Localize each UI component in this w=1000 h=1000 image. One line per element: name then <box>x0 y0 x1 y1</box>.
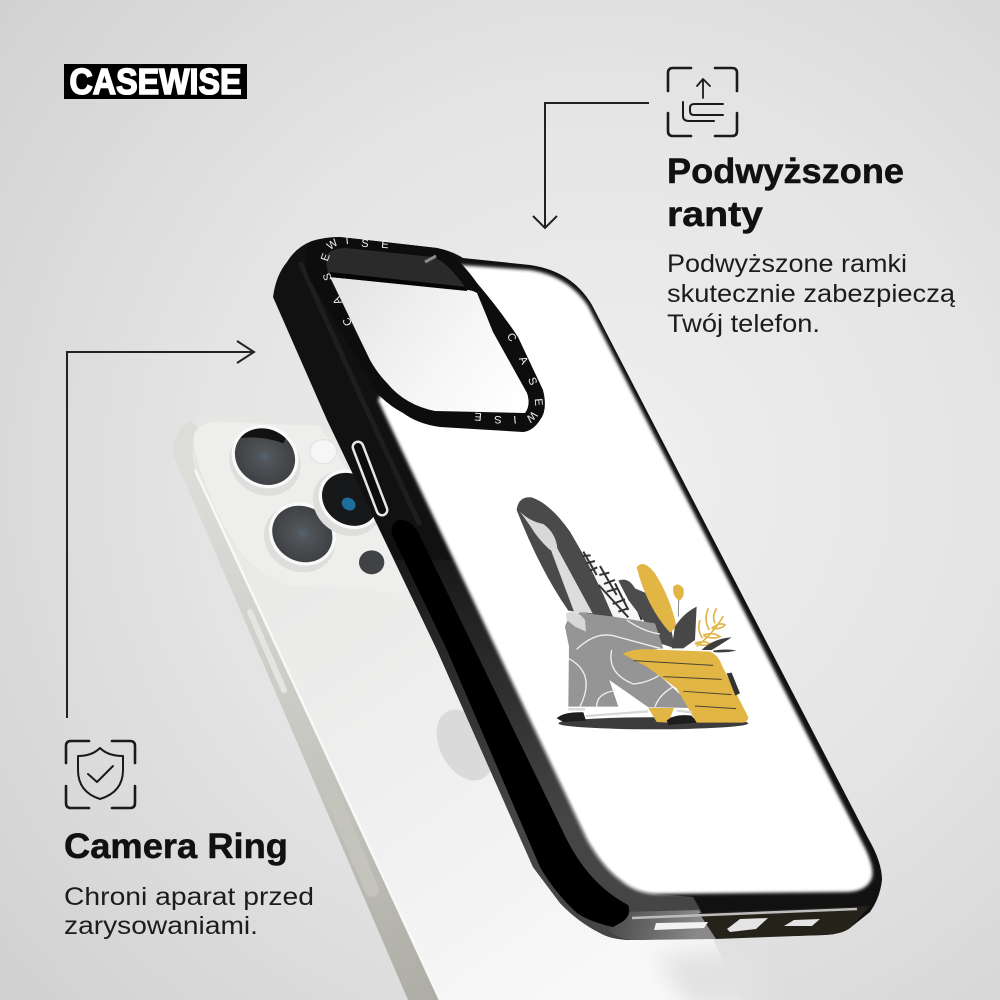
ring lettering: S <box>321 272 335 282</box>
ring lettering: C <box>504 331 518 344</box>
dark bush <box>618 580 675 648</box>
ring lettering: W <box>523 408 539 425</box>
flash <box>310 440 337 464</box>
yellow outlined fern <box>695 608 725 647</box>
shoes <box>557 712 697 725</box>
description: raised edges: skutecznie zabezpieczą <box>667 280 955 308</box>
inner wall shadow <box>330 272 467 291</box>
ring lettering: S <box>361 238 369 250</box>
wall gloss <box>425 256 436 262</box>
white fern panel <box>580 548 644 622</box>
trousers <box>565 613 695 708</box>
suitcase lines <box>633 661 736 709</box>
description: raised edges: Podwyższone ramki <box>667 250 907 278</box>
arrow: top callout <box>533 103 649 228</box>
ring lettering: A <box>331 294 345 306</box>
side button lower <box>333 797 372 890</box>
description: camera ring <box>64 883 314 940</box>
lens 1 <box>230 425 300 496</box>
ring lettering: S <box>525 376 539 387</box>
description: camera ring: zarysowaniami. <box>64 912 258 940</box>
suitcase lower piece <box>648 708 674 723</box>
ring lettering: E <box>474 410 482 422</box>
right bottom side face <box>699 906 870 939</box>
icon: shield check <box>66 741 135 808</box>
text block: raised edges <box>667 152 955 338</box>
case body <box>273 237 882 940</box>
logo: CASEWISE <box>70 61 242 102</box>
side button upper <box>250 612 284 690</box>
ring lettering: I <box>345 235 349 247</box>
ring opening <box>330 277 529 413</box>
ring lettering: E <box>319 252 333 263</box>
arrow: camera callout <box>67 341 254 718</box>
hair <box>517 497 613 617</box>
fern marks <box>583 552 642 620</box>
tulip stem <box>677 600 680 617</box>
bottom side sheen <box>608 910 716 940</box>
illustration: woman with suitcase and plants <box>517 497 748 729</box>
heading: camera ring: Camera Ring <box>64 827 288 866</box>
white screen <box>378 265 872 894</box>
ring body <box>305 237 545 432</box>
suitcase <box>623 649 748 723</box>
white phone <box>172 413 775 1000</box>
heading: raised edges <box>667 152 904 234</box>
ring lettering: C <box>341 315 355 328</box>
description: camera ring: Chroni aparat przed <box>64 883 314 911</box>
left rim groove <box>300 262 420 525</box>
tulip <box>673 585 684 601</box>
lower rim sheen <box>395 560 716 940</box>
ring lettering: E <box>381 239 389 251</box>
hand <box>566 612 586 632</box>
sensor <box>359 550 384 574</box>
ring lettering: A <box>516 354 530 367</box>
ring lettering: I <box>513 413 517 425</box>
trousers lines <box>568 620 675 707</box>
heading: raised edges: ranty <box>667 195 764 234</box>
apple logo <box>425 700 505 790</box>
sole highlight <box>568 709 692 716</box>
inner wall <box>326 248 467 290</box>
side button pill <box>358 447 382 510</box>
dark leaf <box>672 607 697 648</box>
lens 2 <box>252 489 349 585</box>
port: usb <box>727 918 768 932</box>
black case <box>273 237 882 940</box>
lens 3 <box>300 455 396 549</box>
side slot <box>392 520 629 927</box>
face <box>520 512 557 550</box>
ring lettering: S <box>494 413 502 425</box>
ground shadow <box>558 717 748 729</box>
camera plateau <box>194 425 384 574</box>
phone body <box>172 416 742 1000</box>
arm <box>551 548 593 613</box>
port: speaker <box>654 922 708 930</box>
ring lettering: E <box>532 398 544 406</box>
port: mic <box>784 919 820 926</box>
bottom highlight line <box>632 909 857 918</box>
ring lettering: W <box>325 237 341 253</box>
dark side leaves <box>702 637 737 652</box>
side highlight <box>195 470 440 1000</box>
ring lettering <box>319 235 544 425</box>
yellow feather leaf <box>637 564 677 633</box>
description: raised edges <box>667 250 955 338</box>
lower fade <box>655 945 775 1000</box>
camera ring <box>305 235 545 432</box>
heading: raised edges: Podwyższone <box>667 152 904 191</box>
icon: raised edges <box>668 68 737 136</box>
phone side band <box>172 421 440 1000</box>
text block: camera ring <box>64 827 314 940</box>
description: raised edges: Twój telefon. <box>667 310 820 338</box>
suitcase handle <box>727 673 740 696</box>
